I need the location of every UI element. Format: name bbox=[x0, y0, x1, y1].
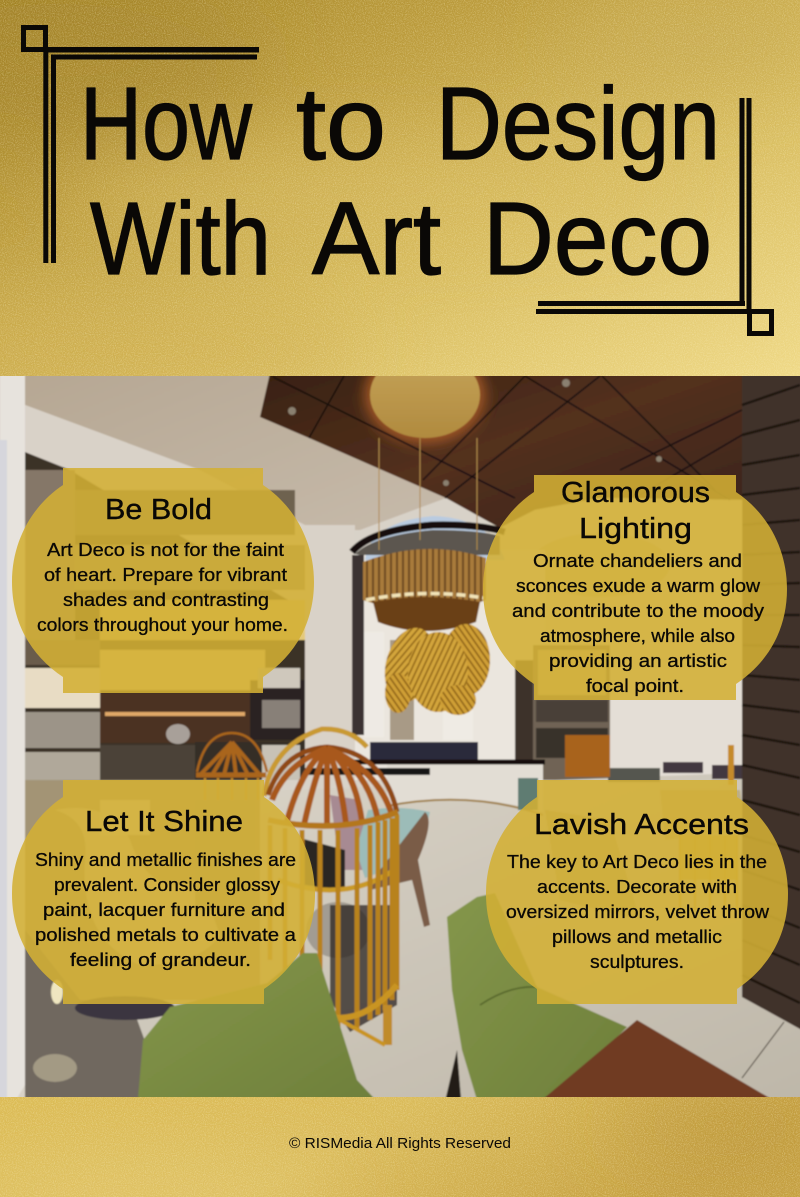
body: let it shine: prevalent. Consider glossy bbox=[54, 875, 280, 895]
body: let it shine bbox=[35, 850, 297, 970]
body: glamorous lighting: and contribute to the moody bbox=[512, 601, 764, 621]
bar counter bbox=[305, 742, 545, 815]
pendant cords bbox=[379, 438, 477, 550]
body: glamorous lighting: Ornate chandeliers and bbox=[533, 551, 742, 571]
body: lavish accents: sculptures. bbox=[590, 952, 684, 972]
body: be bold: colors throughout your home. bbox=[37, 615, 288, 635]
body: be bold: shades and contrasting bbox=[63, 590, 269, 610]
body: be bold: of heart. Prepare for vibrant bbox=[44, 565, 287, 585]
heading: glamorous lighting bbox=[561, 477, 710, 545]
title: How bbox=[80, 66, 253, 181]
title: Design bbox=[436, 66, 720, 181]
title: With bbox=[90, 181, 271, 296]
body: let it shine: Shiny and metallic finishes are bbox=[35, 850, 296, 870]
body: be bold: Art Deco is not for the faint bbox=[47, 540, 284, 560]
title: Art bbox=[312, 181, 441, 296]
heading: let it shine: Let It Shine bbox=[85, 806, 243, 838]
body: glamorous lighting bbox=[512, 551, 764, 696]
seats behind cage bbox=[300, 795, 430, 958]
body: be bold bbox=[37, 540, 288, 635]
furniture far right bbox=[518, 735, 745, 920]
green chair right bbox=[443, 893, 627, 1110]
body: lavish accents bbox=[506, 852, 770, 972]
heading: be bold: Be Bold bbox=[105, 494, 212, 526]
large birdcage bbox=[264, 729, 398, 1045]
interior photo bbox=[0, 376, 800, 1097]
heading: glamorous lighting: Glamorous bbox=[561, 477, 710, 509]
body: lavish accents: pillows and metallic bbox=[552, 927, 722, 947]
back wall and far room bbox=[355, 550, 745, 780]
chandelier bbox=[363, 549, 490, 740]
body: lavish accents: The key to Art Deco lies in the bbox=[507, 852, 767, 872]
left pillar bbox=[0, 360, 25, 1110]
right wall slats bbox=[742, 360, 800, 1040]
body: glamorous lighting: providing an artistic bbox=[549, 651, 727, 671]
gold header band bbox=[0, 0, 800, 400]
body: lavish accents: oversized mirrors, velvet throw bbox=[506, 902, 770, 922]
dome skylight bbox=[352, 516, 505, 735]
floor bbox=[25, 770, 800, 1110]
floor seam bbox=[742, 1022, 784, 1078]
body: glamorous lighting: sconces exude a warm glow bbox=[516, 576, 761, 596]
panel: be bold bbox=[12, 468, 314, 693]
panel: glamorous lighting bbox=[483, 475, 787, 700]
footer copyright: © RISMedia All Rights Reserved bbox=[289, 1135, 511, 1152]
deco frame: top left corner bbox=[21, 25, 259, 263]
panel: let it shine bbox=[12, 780, 315, 1004]
ceiling and side wall bbox=[24, 376, 496, 535]
green chair left bbox=[138, 952, 374, 1097]
wooden table bbox=[544, 1020, 770, 1097]
body: lavish accents: accents. Decorate with bbox=[537, 877, 737, 897]
body: let it shine: polished metals to cultivate a bbox=[35, 925, 297, 945]
armchair behind shine panel bbox=[102, 802, 148, 834]
heading: lavish accents: Lavish Accents bbox=[534, 809, 749, 841]
bookcase left bbox=[25, 452, 305, 782]
heading: glamorous lighting: Lighting bbox=[579, 513, 692, 545]
body: glamorous lighting: atmosphere, while also bbox=[540, 626, 735, 646]
body: let it shine: feeling of grandeur. bbox=[70, 950, 251, 970]
panel: lavish accents bbox=[486, 780, 788, 1004]
title: Deco bbox=[483, 181, 712, 296]
body: glamorous lighting: focal point. bbox=[586, 676, 684, 696]
title bbox=[80, 66, 720, 296]
body: let it shine: paint, lacquer furniture and bbox=[43, 900, 285, 920]
wood ceiling bbox=[259, 376, 744, 528]
gold footer band bbox=[0, 1090, 800, 1197]
small birdcage bbox=[195, 730, 269, 780]
title: to bbox=[296, 66, 386, 181]
deco frame: bottom right corner bbox=[536, 98, 774, 336]
